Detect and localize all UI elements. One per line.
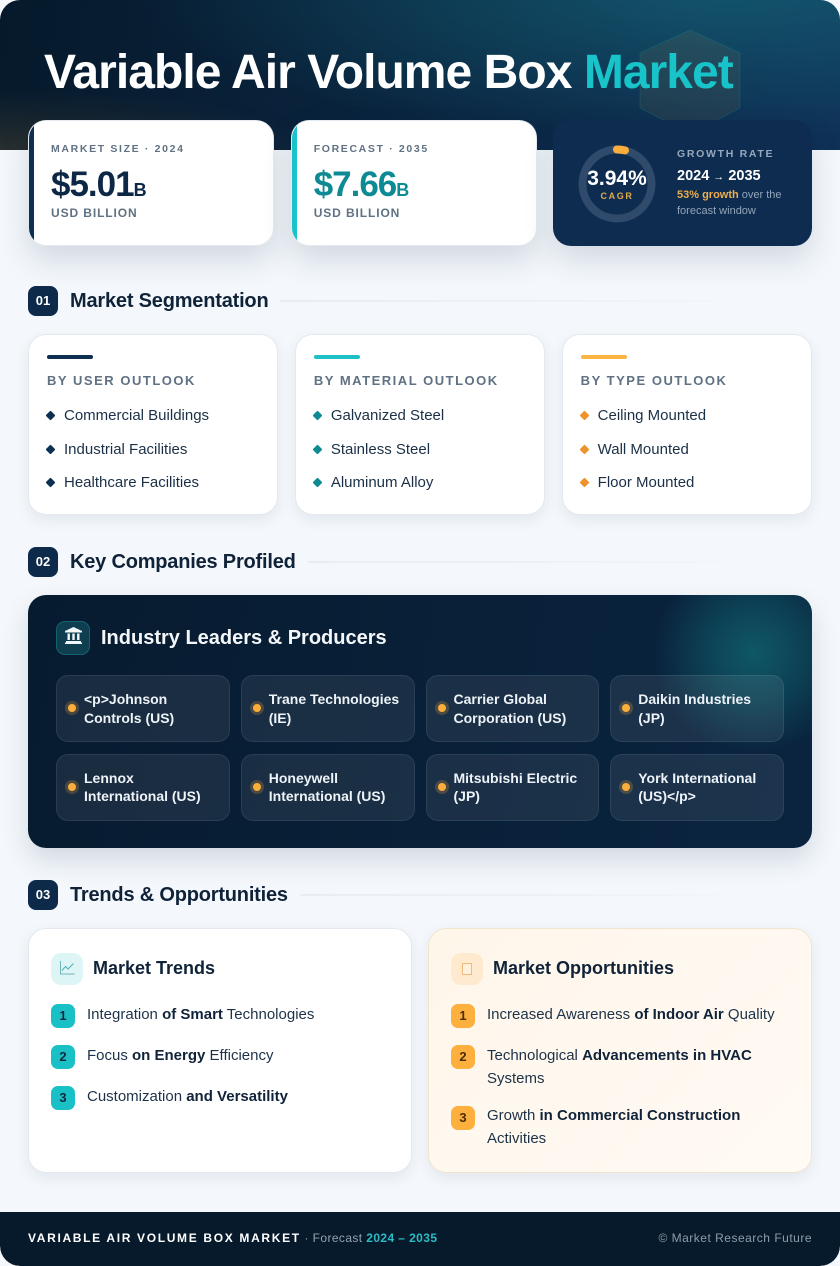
section heading: Trends & Opportunities: [28, 880, 478, 910]
icon: decorative hexagon: [640, 30, 740, 120]
KPI card: market size: MARKET SIZE · 2024: [51, 143, 185, 155]
section heading: Key Companies Profiled: 02: [36, 554, 50, 569]
company: Lennox: [56, 754, 230, 821]
panel: market opportunities: Systems: [487, 1070, 545, 1087]
company: Daikin Industries: [610, 675, 784, 742]
panel: by type outlook: Ceiling Mounted: [598, 407, 706, 424]
panel: by type outlook: BY TYPE OUTLOOK: [581, 373, 727, 388]
panel: market trends: Customization and Versatility: [87, 1088, 288, 1105]
CAGR value: 3.94%: [587, 167, 647, 190]
growth text: 2024 → 2035: [677, 168, 761, 184]
panel: market trends: Focus on Energy Efficiency: [87, 1047, 273, 1064]
panel: market opportunities: Growth in Commercial Construction: [487, 1107, 740, 1124]
section heading: Market Segmentation: 01: [36, 293, 50, 308]
company: Daikin Industries: (JP): [638, 710, 665, 726]
company: Mitsubishi Electric: Mitsubishi Electric: [454, 770, 577, 786]
company: Mitsubishi Electric: (JP): [454, 788, 480, 804]
opportunity 1: 1: [459, 1008, 467, 1023]
trend 2: 2: [59, 1049, 67, 1064]
panel: by material outlook: Stainless Steel: [331, 441, 430, 458]
company: Mitsubishi Electric: [426, 754, 599, 821]
heading: Market Trends: [93, 958, 215, 978]
company: Lennox: Lennox: [84, 770, 134, 786]
company: Daikin Industries: Daikin Industries: [638, 691, 751, 707]
section heading: Trends & Opportunities: 03: [36, 887, 50, 902]
company: Carrier Global: [426, 675, 599, 742]
KPI card: market size: [28, 120, 274, 246]
KPI card: forecast: FORECAST · 2035: [314, 143, 429, 155]
title: Variable Air Volume Box Market: [44, 46, 733, 99]
panel: by material outlook: BY MATERIAL OUTLOOK: [314, 373, 499, 388]
opportunity 2: [451, 1045, 475, 1069]
icon: placeholder glyph: [451, 953, 483, 985]
KPI card: market size: USD BILLION: [51, 206, 138, 220]
company: Trane Technologies: [241, 675, 414, 742]
growth text: 53% growth over the: [677, 189, 782, 201]
opportunity 2: 2: [459, 1049, 467, 1064]
icon: institution: [56, 621, 90, 655]
KPI card: forecast: $7.66B: [314, 165, 409, 204]
panel: by material outlook: Galvanized Steel: [331, 407, 444, 424]
panel: by type outlook: Wall Mounted: [598, 441, 689, 458]
icon: chart: [51, 953, 83, 985]
company: York International: [610, 754, 784, 821]
panel: market trends: Integration of Smart Technologies: [87, 1006, 314, 1023]
trend 1: [51, 1004, 75, 1028]
panel: market opportunities: Activities: [487, 1130, 546, 1147]
company: Honeywell: International (US): [269, 788, 385, 804]
CAGR label: CAGR: [601, 191, 633, 201]
opportunity 3: 3: [459, 1110, 467, 1125]
growth text: [677, 148, 782, 217]
company: Johnson Controls: Controls (US): [84, 710, 174, 726]
panel: by material outlook: [295, 334, 545, 515]
company: Carrier Global: Corporation (US): [454, 710, 566, 726]
growth text: GROWTH RATE: [677, 148, 774, 160]
opportunity 3: [451, 1106, 475, 1130]
opportunity 1: [451, 1004, 475, 1028]
footer: [0, 1212, 840, 1266]
company: Johnson Controls: <p>Johnson: [84, 691, 167, 707]
donut ring: [578, 146, 656, 222]
company: York International: York International: [638, 770, 756, 786]
panel: by type outlook: [562, 334, 812, 515]
growth text: forecast window: [677, 205, 756, 217]
company: Carrier Global: Carrier Global: [454, 691, 547, 707]
panel: by user outlook: BY USER OUTLOOK: [47, 373, 196, 388]
panel: market trends: [28, 928, 412, 1173]
company: York International: (US)</p>: [638, 788, 696, 804]
trend 2: [51, 1045, 75, 1069]
trend 3: [51, 1086, 75, 1110]
section heading: Trends & Opportunities: Trends & Opportunities: [70, 884, 288, 906]
heading: Market Opportunities: [493, 958, 674, 978]
company: Lennox: International (US): [84, 788, 201, 804]
section heading: Key Companies Profiled: Key Companies Profiled: [70, 551, 296, 573]
panel: market opportunities: Increased Awareness of Indoor Air Quality: [487, 1006, 775, 1023]
company: Trane Technologies: (IE): [269, 710, 291, 726]
section heading: Market Segmentation: [28, 286, 466, 316]
company: Honeywell: [241, 754, 414, 821]
company: Johnson Controls: [56, 675, 230, 742]
panel: by user outlook: Commercial Buildings: [64, 407, 209, 424]
panel: by type outlook: Floor Mounted: [598, 474, 694, 491]
header band: [0, 0, 840, 150]
KPI card: forecast: [291, 120, 537, 246]
panel: by user outlook: Industrial Facilities: [64, 441, 187, 458]
KPI card: CAGR: [553, 120, 812, 246]
KPI card: market size: $5.01B: [51, 165, 147, 204]
footer title: VARIABLE AIR VOLUME BOX MARKET · Forecast 2024 – 2035: [28, 1230, 437, 1244]
KPI card: forecast: USD BILLION: [314, 206, 400, 220]
panel: market opportunities: Technological Advancements in HVAC: [487, 1047, 752, 1064]
section heading: Key Companies Profiled: [28, 547, 482, 577]
section heading: Market Segmentation: Market Segmentation: [70, 290, 268, 312]
trend 3: 3: [59, 1090, 67, 1105]
panel: industry leaders: [28, 595, 812, 848]
footer credit: © Market Research Future: [658, 1230, 812, 1244]
panel: by material outlook: Aluminum Alloy: [331, 474, 433, 491]
company: Trane Technologies: Trane Technologies: [269, 691, 399, 707]
trend 1: 1: [59, 1008, 67, 1023]
panel heading: Industry Leaders & Producers: [101, 627, 387, 649]
company: Honeywell: Honeywell: [269, 770, 338, 786]
panel: by user outlook: Healthcare Facilities: [64, 474, 199, 491]
panel: by user outlook: [28, 334, 278, 515]
panel: market opportunities: [428, 928, 812, 1173]
